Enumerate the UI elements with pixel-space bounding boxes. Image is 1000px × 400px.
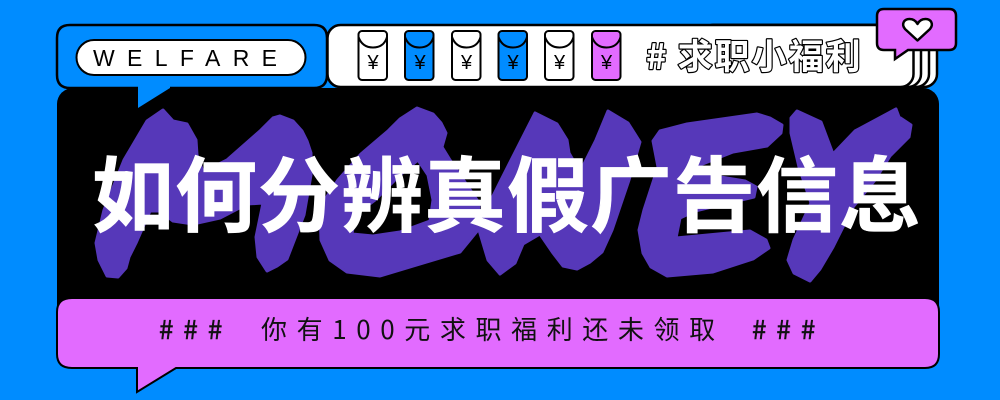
envelope blue: ¥	[413, 52, 426, 74]
panel: black main	[57, 88, 939, 328]
stacked white cards	[700, 25, 937, 87]
panel: white envelope strip	[328, 25, 914, 87]
welfare label: WELFARE	[93, 45, 277, 71]
envelope white: ¥	[366, 52, 379, 74]
envelope pink: ¥	[600, 52, 613, 74]
right hashes: ###	[752, 310, 825, 347]
envelope white	[545, 31, 574, 80]
envelope row	[358, 31, 620, 80]
envelope blue	[405, 31, 434, 80]
bubble shape	[57, 25, 327, 108]
bubble outline	[57, 25, 327, 88]
envelope white: ¥	[553, 52, 566, 74]
title: 如何分辨真假广告信息	[92, 130, 922, 249]
letter M	[96, 110, 311, 277]
envelope blue	[498, 31, 527, 80]
welfare bubble	[57, 25, 327, 108]
brush lettering: MONEY	[96, 108, 911, 281]
bottom bubble	[57, 298, 939, 392]
letter Y	[788, 109, 911, 281]
envelope blue: ¥	[506, 52, 519, 74]
promo text: 你有100元求职福利还未领取	[261, 310, 725, 347]
letter N	[479, 111, 640, 274]
label pill	[76, 40, 306, 75]
letter E	[639, 114, 782, 276]
left hashes: ###	[159, 310, 232, 347]
bubble shape	[57, 298, 939, 392]
envelope white	[358, 31, 387, 80]
hashtag text: # 求职小福利	[646, 29, 863, 80]
letter O	[320, 108, 479, 276]
envelope pink	[592, 31, 620, 80]
heart bubble	[877, 9, 956, 59]
envelope white: ¥	[460, 52, 473, 74]
bubble shape	[877, 9, 956, 59]
icon: heart	[903, 19, 932, 40]
envelope white	[452, 31, 480, 80]
